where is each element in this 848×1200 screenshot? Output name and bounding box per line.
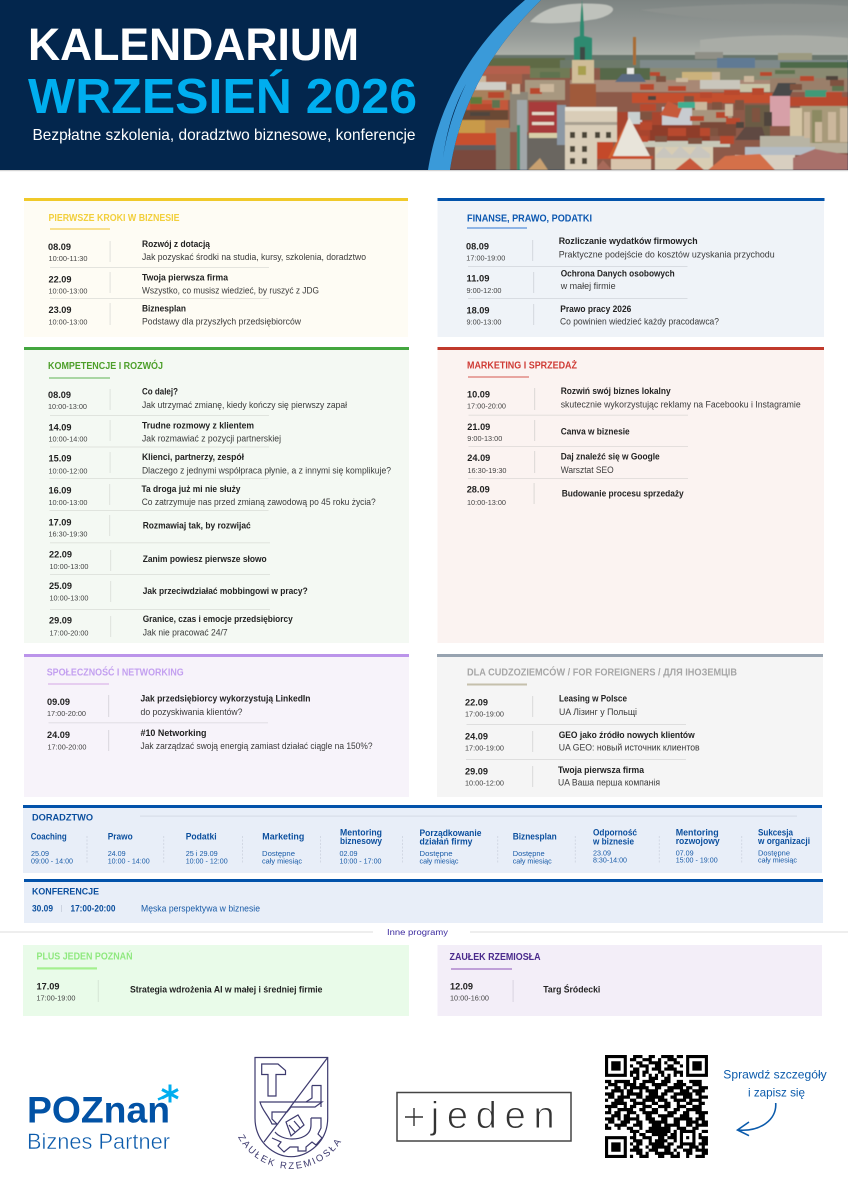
title line 2: WRZESIEŃ 2026 <box>28 70 417 124</box>
event: Canva w biznesie: 9:00-13:00 <box>467 434 502 443</box>
call to action text: i zapisz się <box>748 1086 805 1100</box>
logo: Poznań Biznes Partner: POZnan <box>27 1089 170 1130</box>
advisory: Sukcesja w organizacji: cały miesiąc <box>758 855 797 864</box>
conference event: 30.09 <box>32 903 53 913</box>
event: Daj znaleźć się w Google: Warsztat SEO <box>561 465 614 475</box>
event: Ochrona Danych osobowych: 11.09 <box>466 272 490 283</box>
conference event: 17:00-20:00 <box>70 903 116 913</box>
event: Rozmawiaj tak, by rozwijać: 16:30-19:30 <box>48 530 88 539</box>
event: Targ Śródecki: 10:00-16:00 <box>450 994 489 1003</box>
event: Strategia wdrożenia AI: Strategia wdrożenia AI w małej i średniej firmie <box>130 985 322 995</box>
conference event <box>32 903 260 913</box>
advisory: Biznesplan: Dostępne <box>513 849 545 858</box>
advisory: Podatki: 25 i 29.09 <box>186 849 218 858</box>
event: Klienci, partnerzy, zespół: Dlaczego z jednymi współpraca płynie, a z innymi się komplikuje? <box>142 465 391 475</box>
call to action text: Sprawdź szczegóły <box>723 1067 827 1081</box>
event: Granice, czas i emocje przedsiębiorcy: Jak nie pracować 24/7 <box>143 627 228 637</box>
event: LinkedIn: Jak przedsiębiorcy wykorzystują LinkedIn <box>140 693 310 703</box>
event: Trudne rozmowy z klientem <box>48 420 281 444</box>
event: Twoja pierwsza firma (UA): 10:00-12:00 <box>465 779 504 788</box>
event: Biznesplan: Biznesplan <box>142 304 186 314</box>
event: Budowanie procesu sprzedaży: 28.09 <box>467 484 490 495</box>
event: Ta droga już mi nie służy: 10:00-13:00 <box>48 498 88 507</box>
advisory: Odporność w biznesie <box>592 828 637 864</box>
panel: doradztwo <box>23 805 822 873</box>
event: Budowanie procesu sprzedaży: 10:00-13:00 <box>467 498 506 507</box>
title line 1: KALENDARIUM <box>28 19 359 70</box>
event: Klienci, partnerzy, zespół <box>48 452 391 475</box>
event: Twoja pierwsza firma <box>48 272 319 295</box>
advisory: Odporność w biznesie: w biznesie <box>592 836 634 846</box>
event: Leasing w Polsce: Leasing w Polsce <box>559 693 627 703</box>
event: Twoja pierwsza firma: Twoja pierwsza firma <box>142 273 229 283</box>
advisory: Prawo <box>108 832 150 866</box>
advisory: Marketing: cały miesiąc <box>262 857 302 866</box>
event: Granice, czas i emocje przedsiębiorcy: Granice, czas i emocje przedsiębiorcy <box>143 614 293 624</box>
event: Co dalej?: 10:00-13:00 <box>48 402 87 411</box>
event: Zanim powiesz pierwsze słowo: 22.09 <box>49 549 72 560</box>
event: Twoja pierwsza firma: 22.09 <box>48 273 72 284</box>
advisory: Sukcesja w organizacji: Sukcesja <box>758 828 794 838</box>
event: Daj znaleźć się w Google: Daj znaleźć się w Google <box>561 452 660 462</box>
event: Rozliczanie wydatków firmowych: Rozliczanie wydatków firmowych <box>559 236 698 246</box>
advisory: Mentoring biznesowy <box>340 828 382 866</box>
advisory: Prawo: 10:00 - 14:00 <box>108 857 150 866</box>
advisory: Mentoring biznesowy: 10:00 - 17:00 <box>340 857 382 866</box>
event: Strategia wdrożenia AI: 17:00-19:00 <box>36 994 76 1003</box>
event: Daj znaleźć się w Google: 24.09 <box>467 452 490 463</box>
event: Granice, czas i emocje przedsiębiorcy: 17:00-20:00 <box>50 629 88 638</box>
event: Ochrona Danych osobowych: Ochrona Danych osobowych <box>561 269 675 279</box>
panel: plus jeden poznań <box>23 945 409 1016</box>
panel: kompetencje i rozwój <box>24 347 409 643</box>
heading: pierwsze kroki: PIERWSZE KROKI W BIZNESIE <box>48 213 180 224</box>
event: Klienci, partnerzy, zespół: Klienci, partnerzy, zespół <box>142 452 244 462</box>
event: #10 Networking: #10 Networking <box>140 728 206 738</box>
advisory: Mentoring rozwojowy <box>676 828 720 864</box>
logo: plus jeden <box>397 1092 571 1141</box>
heading: dla cudzoziemców: DLA CUDZOZIEMCÓW / FOR FOREIGNERS / ДЛЯ ІНОЗЕМЦІВ <box>467 666 737 679</box>
event: Granice, czas i emocje przedsiębiorcy: 29.09 <box>49 615 72 626</box>
heading: kompetencje: KOMPETENCJE I ROZWÓJ <box>48 359 163 372</box>
event: Ochrona Danych osobowych <box>466 269 675 295</box>
header banner <box>0 0 848 171</box>
QR code <box>605 1055 708 1158</box>
advisory: Mentoring rozwojowy: rozwojowy <box>676 836 720 846</box>
heading: finanse: FINANSE, PRAWO, PODATKI <box>467 213 592 224</box>
heading: konferencje: KONFERENCJE <box>32 886 100 897</box>
event: Twoja pierwsza firma: 10:00-13:00 <box>48 286 88 295</box>
advisory: Sukcesja w organizacji: Dostępne <box>758 848 790 857</box>
event: Daj znaleźć się w Google <box>467 451 660 475</box>
advisory: Mentoring rozwojowy: 15:00 - 19:00 <box>676 855 718 864</box>
event: Budowanie procesu sprzedaży: Budowanie procesu sprzedaży <box>562 489 684 499</box>
event: LinkedIn: 17:00-20:00 <box>47 709 86 718</box>
event: Strategia wdrożenia AI <box>36 980 322 1003</box>
event: Strategia wdrożenia AI: 17.09 <box>36 980 60 991</box>
event: Ochrona Danych osobowych: 9:00-12:00 <box>466 286 502 295</box>
advisory: Mentoring biznesowy: 02.09 <box>340 849 358 858</box>
logo: plus jeden: jeden <box>430 1095 555 1137</box>
advisory: Marketing: Marketing <box>262 832 304 842</box>
advisory: Porządkowanie działań firmy: Dostępne <box>420 849 452 858</box>
conference event: Męska perspektywa w biznesie <box>141 903 260 913</box>
event: Rozwój z dotacją: Rozwój z dotacją <box>142 239 211 249</box>
advisory: Prawo: 24.09 <box>108 849 126 858</box>
event: Twoja pierwsza firma (UA) <box>465 765 660 788</box>
logo: Poznań Biznes Partner <box>27 1084 178 1154</box>
event: Rozliczanie wydatków firmowych: 08.09 <box>466 240 489 251</box>
event: Ochrona Danych osobowych: w małej firmie <box>560 281 616 291</box>
advisory: Coaching: 09:00 - 14:00 <box>31 857 73 866</box>
event: Prawo pracy 2026 <box>466 304 719 327</box>
event: Jak przeciwdziałać mobbingowi w pracy?: 10:00-13:00 <box>50 594 88 603</box>
advisory: Prawo: Prawo <box>108 832 133 842</box>
advisory: Sukcesja w organizacji: w organizacji <box>757 836 810 846</box>
event: Rozwój z dotacją: 10:00-11:30 <box>48 254 88 263</box>
advisory: Porządkowanie działań firmy <box>420 828 482 866</box>
advisory: Odporność w biznesie: 8:30-14:00 <box>593 855 627 864</box>
event: Jak przeciwdziałać mobbingowi w pracy?: 25.09 <box>49 580 72 591</box>
event: Trudne rozmowy z klientem: Jak rozmawiać z pozycji partnerskiej <box>142 434 281 444</box>
event: Granice, czas i emocje przedsiębiorcy <box>49 614 293 638</box>
event: Co dalej?: 08.09 <box>48 389 71 400</box>
event: GEO jako źródło nowych klientów: GEO jako źródło nowych klientów <box>559 730 696 740</box>
crest lettering: ZAUŁEK RZEMIOSŁA <box>238 1134 342 1169</box>
event: Rozwiń swój biznes lokalny: Rozwiń swój biznes lokalny <box>561 386 671 396</box>
event: LinkedIn: 09.09 <box>47 696 70 707</box>
advisory: Biznesplan: Biznesplan <box>513 832 557 842</box>
event: Co dalej?: Co dalej? <box>142 387 178 397</box>
event: LinkedIn: do pozyskiwania klientów? <box>140 707 242 717</box>
panel: konferencje <box>24 879 823 923</box>
event: Prawo pracy 2026: Prawo pracy 2026 <box>560 304 631 314</box>
event: Rozliczanie wydatków firmowych: Praktyczne podejście do kosztów uzyskania przychodu <box>559 249 775 259</box>
event: Co dalej?: Jak utrzymać zmianę, kiedy kończy się pierwszy zapał <box>142 400 347 410</box>
event: Twoja pierwsza firma (UA): 29.09 <box>465 765 488 776</box>
event: Trudne rozmowy z klientem: Trudne rozmowy z klientem <box>142 420 254 430</box>
section label: inne programy: Inne programy <box>387 927 449 937</box>
event: Prawo pracy 2026: 9:00-13:00 <box>466 318 502 327</box>
arrow pointing to QR code <box>738 1103 776 1136</box>
event: Leasing w Polsce: 22.09 <box>465 696 488 707</box>
panel: zaułek rzemiosła <box>438 945 822 1016</box>
advisory: Coaching <box>31 832 73 866</box>
advisory: Podatki: 10:00 - 12:00 <box>186 857 228 866</box>
event: Trudne rozmowy z klientem: 14.09 <box>48 422 72 432</box>
header photo: Poznań old town <box>430 0 848 170</box>
event: #10 Networking: Jak zarządzać swoją energią zamiast działać ciągle na 150%? <box>140 741 372 751</box>
advisory: Marketing: Dostępne <box>262 849 295 858</box>
event: Biznesplan <box>48 303 301 327</box>
event: Ta droga już mi nie służy: 16.09 <box>48 485 72 496</box>
event: Rozmawiaj tak, by rozwijać: Rozmawiaj tak, by rozwijać <box>143 521 251 531</box>
logo: Zaułek Rzemiosła crest <box>238 1056 342 1169</box>
event: GEO jako źródło nowych klientów <box>465 730 700 753</box>
heading: doradztwo: DORADZTWO <box>32 813 94 824</box>
advisory: Porządkowanie działań firmy: cały miesiąc <box>420 857 459 866</box>
event: #10 Networking <box>47 728 372 752</box>
event: Biznesplan: 23.09 <box>48 304 72 315</box>
header blue swoosh <box>428 0 541 170</box>
advisory: Coaching: Coaching <box>31 832 67 842</box>
advisory: Odporność w biznesie: 23.09 <box>593 848 611 857</box>
subtitle: Bezpłatne szkolenia, doradztwo biznesowe, konferencje <box>32 127 416 144</box>
call to action text <box>723 1067 827 1100</box>
event: Co dalej? <box>48 387 347 411</box>
event: Klienci, partnerzy, zespół: 10:00-12:00 <box>48 466 88 475</box>
event: Prawo pracy 2026: 18.09 <box>466 305 490 316</box>
event: Rozmawiaj tak, by rozwijać <box>48 515 251 539</box>
advisory: Porządkowanie działań firmy: Porządkowanie <box>420 828 482 838</box>
event: Canva w biznesie <box>467 420 630 443</box>
event: Zanim powiesz pierwsze słowo: Zanim powiesz pierwsze słowo <box>143 554 267 564</box>
event: GEO jako źródło nowych klientów: UA GEO: новый источник клиентов <box>559 743 700 753</box>
event: Trudne rozmowy z klientem: 10:00-14:00 <box>48 435 88 444</box>
advisory: Biznesplan <box>513 832 557 866</box>
event: Ta droga już mi nie służy: Ta droga już mi nie służy <box>142 484 240 494</box>
event: GEO jako źródło nowych klientów: 17:00-19:00 <box>465 744 504 753</box>
panel: społeczność i networking <box>24 654 409 797</box>
event: Daj znaleźć się w Google: 16:30-19:30 <box>468 466 506 475</box>
event: #10 Networking: 17:00-20:00 <box>48 743 86 752</box>
advisory: Marketing <box>262 832 304 866</box>
event: Rozwiń swój biznes lokalny <box>467 386 801 411</box>
event: Biznesplan: Podstawy dla przyszłych przedsiębiorców <box>142 317 301 327</box>
heading: marketing: MARKETING I SPRZEDAŻ <box>467 358 577 371</box>
advisory: Mentoring biznesowy: Mentoring <box>340 828 382 838</box>
advisory: Biznesplan: cały miesiąc <box>513 857 552 866</box>
panel: pierwsze kroki w biznesie <box>24 198 408 337</box>
event: Jak przeciwdziałać mobbingowi w pracy?: Jak przeciwdziałać mobbingowi w pracy? <box>143 586 308 596</box>
advisory: Coaching: 25.09 <box>31 849 49 858</box>
event: Rozwiń swój biznes lokalny: 10.09 <box>467 388 490 399</box>
event: Rozmawiaj tak, by rozwijać: 17.09 <box>48 516 72 527</box>
event: Zanim powiesz pierwsze słowo: 10:00-13:00 <box>50 562 88 571</box>
event: Rozliczanie wydatków firmowych <box>466 236 775 263</box>
event: Targ Śródecki <box>450 980 600 1003</box>
event: Budowanie procesu sprzedaży <box>467 483 684 507</box>
event: Klienci, partnerzy, zespół: 15.09 <box>48 453 72 464</box>
event: Zanim powiesz pierwsze słowo <box>49 549 267 571</box>
heading: zaułek: ZAUŁEK RZEMIOSŁA <box>450 952 540 963</box>
advisory: Podatki <box>186 832 228 866</box>
advisory: Mentoring rozwojowy: Mentoring <box>676 828 719 838</box>
event: Leasing w Polsce: UA Лізинг у Польщі <box>559 707 637 717</box>
advisory: Mentoring rozwojowy: 07.09 <box>676 848 694 857</box>
event: GEO jako źródło nowych klientów: 24.09 <box>465 730 488 741</box>
event: LinkedIn <box>47 693 310 718</box>
event: Rozwiń swój biznes lokalny: skutecznie wykorzystując reklamy na Facebooku i Instagramie <box>561 399 801 409</box>
event: Jak przeciwdziałać mobbingowi w pracy? <box>49 580 308 603</box>
event: Rozliczanie wydatków firmowych: 17:00-19:00 <box>466 254 505 263</box>
event: Rozwój z dotacją: 08.09 <box>48 241 71 252</box>
event: Biznesplan: 10:00-13:00 <box>48 318 88 327</box>
event: Rozwój z dotacją <box>48 239 366 263</box>
event: Ta droga już mi nie służy: Co zatrzymuje nas przed zmianą zawodową po 45 roku życia? <box>142 497 376 507</box>
event: Prawo pracy 2026: Co powinien wiedzieć każdy pracodawca? <box>560 317 719 327</box>
event: Twoja pierwsza firma (UA): Twoja pierwsza firma <box>558 765 645 775</box>
event: #10 Networking: 24.09 <box>47 729 70 740</box>
event: Twoja pierwsza firma: Wszystko, co musisz wiedzieć, by ruszyć z JDG <box>142 285 319 295</box>
event: Rozwój z dotacją: Jak pozyskać środki na studia, kursy, szkolenia, doradztwo <box>142 252 366 262</box>
heading: plus jeden: PLUS JEDEN POZNAŃ <box>36 950 132 963</box>
event: Canva w biznesie: 21.09 <box>467 421 490 432</box>
advisory: Mentoring biznesowy: biznesowy <box>340 836 382 846</box>
advisory: Sukcesja w organizacji <box>757 828 810 864</box>
event: Leasing w Polsce: 17:00-19:00 <box>465 709 504 718</box>
logo: Poznań Biznes Partner: Biznes Partner <box>27 1129 170 1154</box>
event: Leasing w Polsce <box>465 693 637 718</box>
advisory: Odporność w biznesie: Odporność <box>593 828 637 838</box>
panel: dla cudzoziemców <box>437 654 823 797</box>
event: Twoja pierwsza firma (UA): UA Ваша перша компанія <box>558 778 660 788</box>
panel: finanse, prawo, podatki <box>438 198 824 337</box>
event: Ta droga już mi nie służy <box>48 484 376 507</box>
event: Targ Śródecki: 12.09 <box>450 980 473 991</box>
heading: społeczność: SPOŁECZNOŚĆ I NETWORKING <box>47 666 184 679</box>
event: Canva w biznesie: Canva w biznesie <box>561 426 630 436</box>
advisory: Porządkowanie działań firmy: działań firmy <box>420 836 472 846</box>
event: Targ Śródecki: Targ Śródecki <box>543 984 600 995</box>
event: Rozwiń swój biznes lokalny: 17:00-20:00 <box>467 402 506 411</box>
advisory: Podatki: Podatki <box>186 832 217 842</box>
panel: marketing i sprzedaż <box>438 347 824 643</box>
